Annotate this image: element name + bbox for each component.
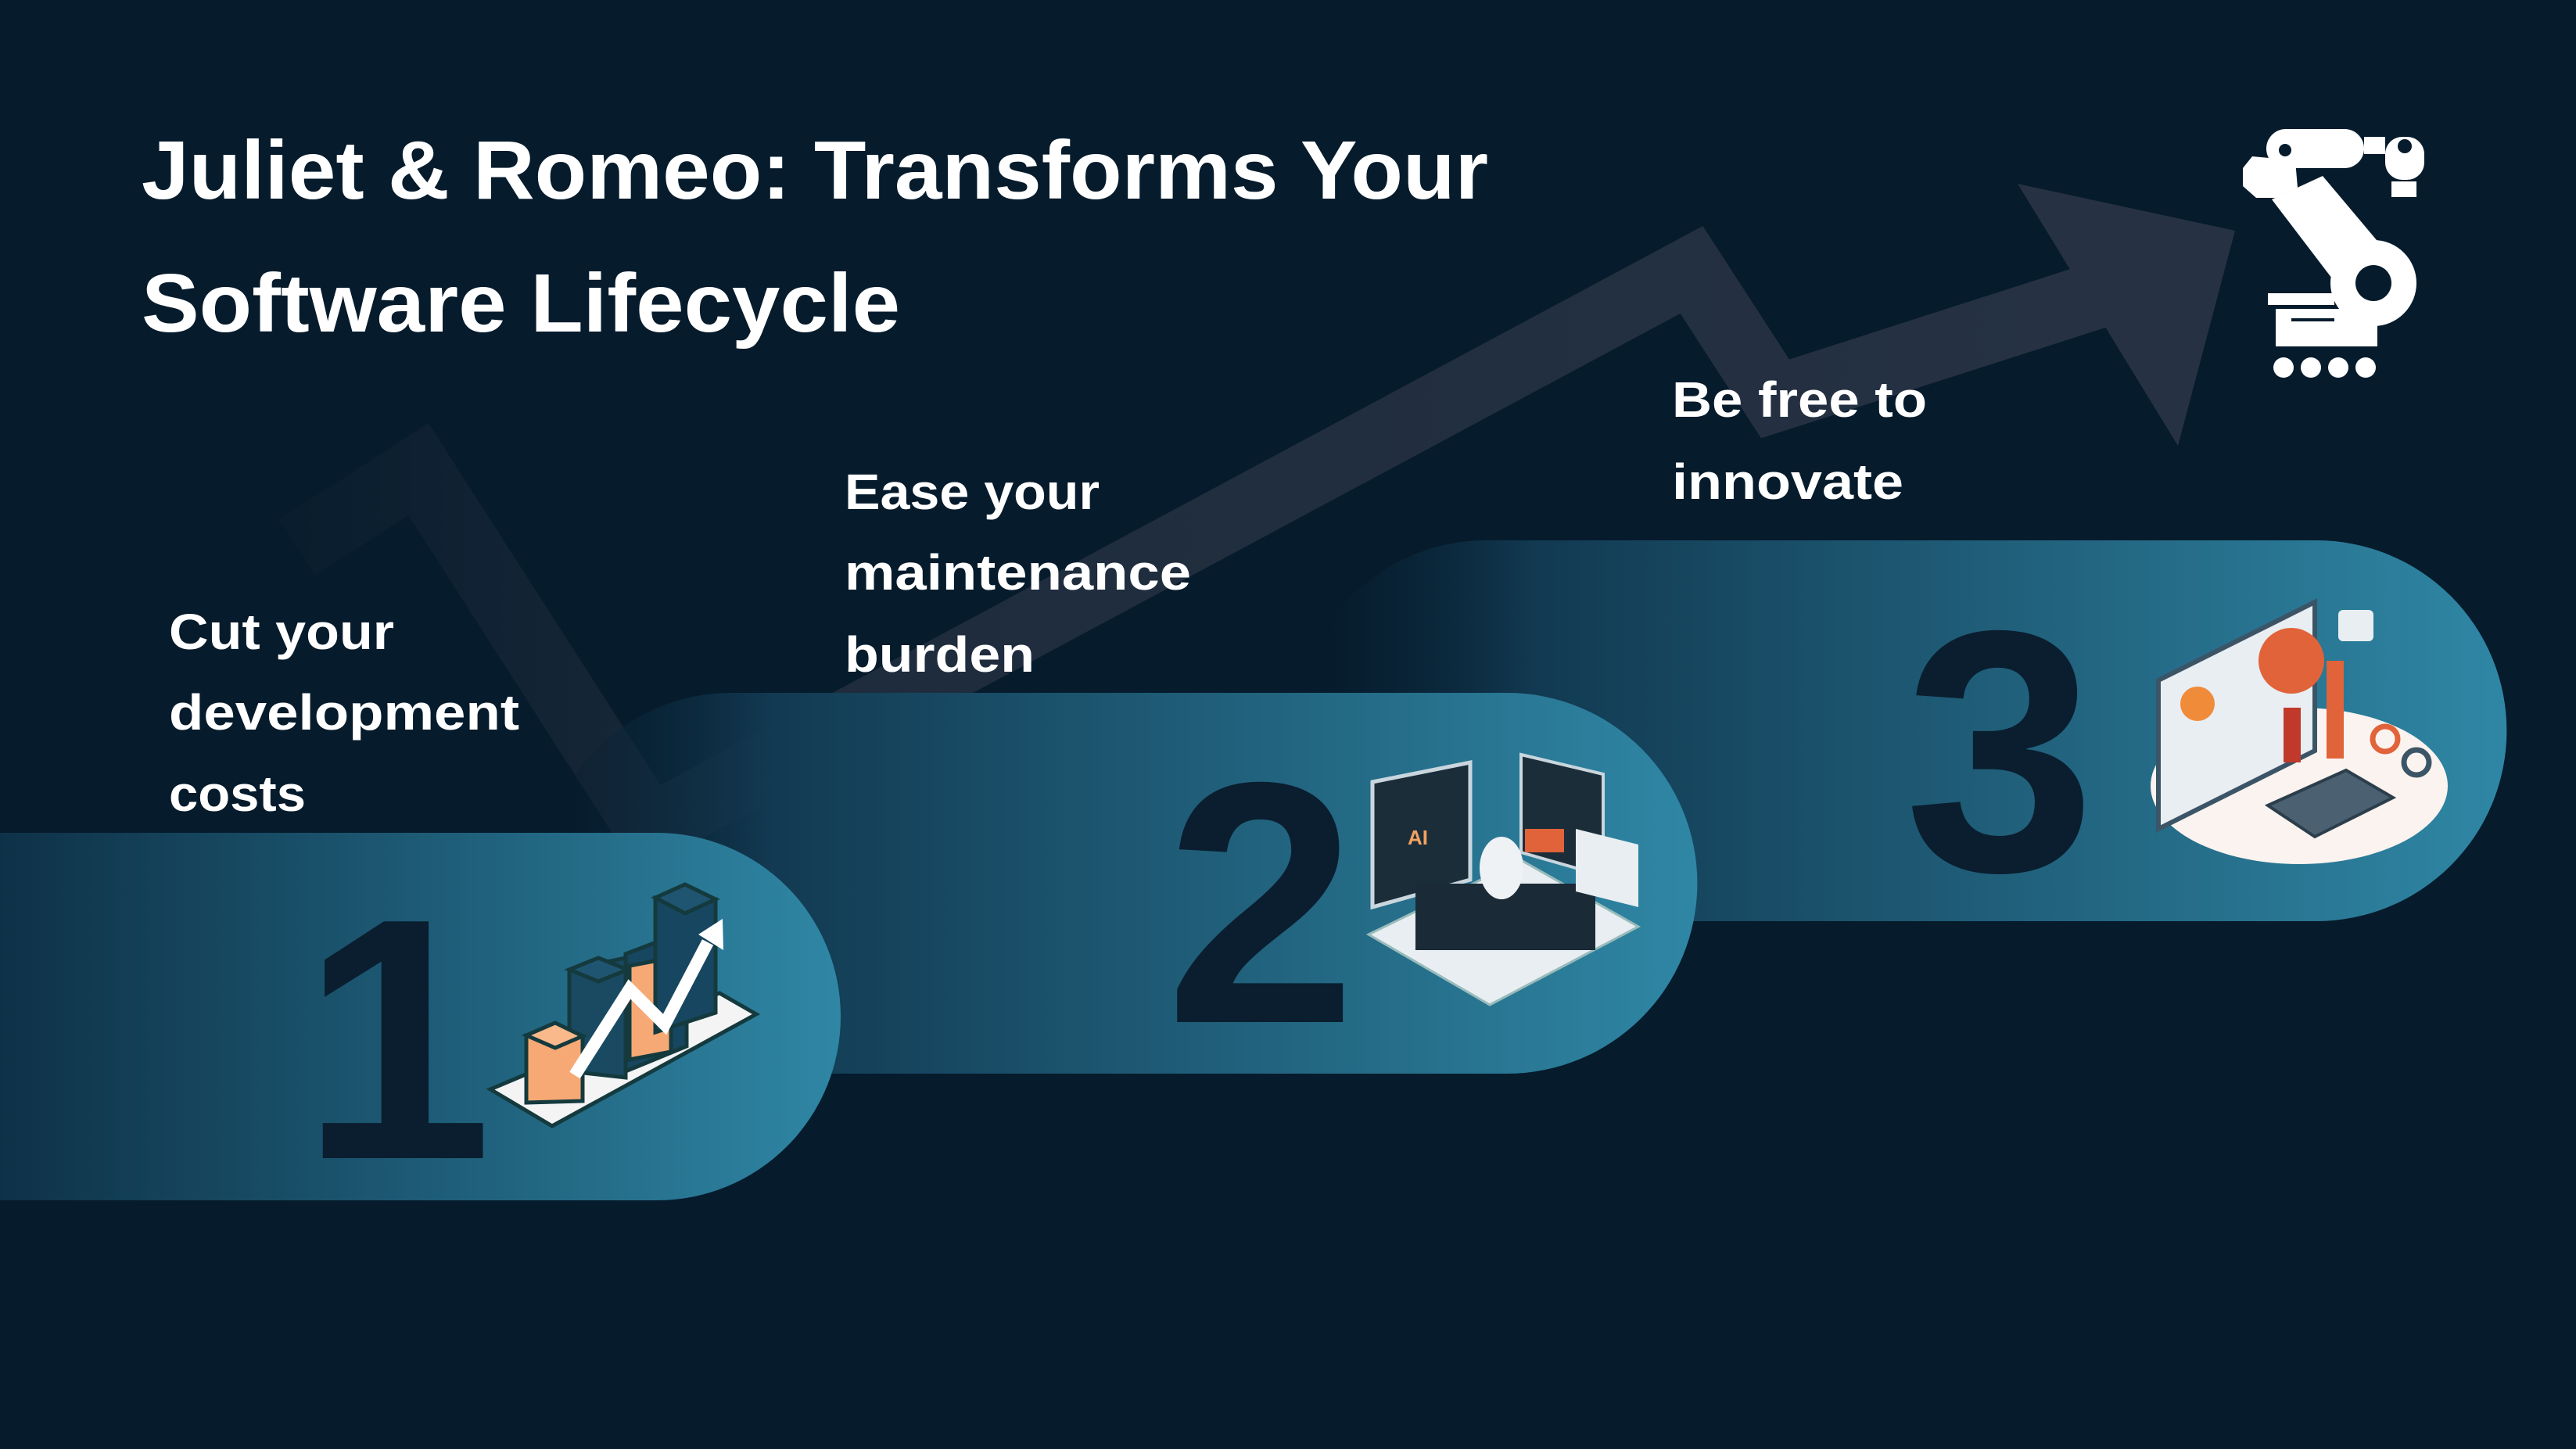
text: step 3: innovate — [1672, 454, 1903, 510]
text: step 2: Ease your — [845, 464, 1100, 520]
illustration 3: presentation — [2151, 602, 2448, 864]
title — [142, 124, 1488, 350]
title: Software Lifecycle — [142, 257, 900, 350]
number 2: 2 — [1165, 712, 1357, 1096]
text: step 3: Be free to — [1672, 371, 1927, 428]
title: Juliet & Romeo: Transforms Your — [142, 124, 1488, 217]
number 3: 3 — [1904, 560, 2096, 944]
text: step 2: burden — [845, 626, 1035, 683]
illustration 1: bar chart — [490, 884, 756, 1126]
icon: robot arm — [2243, 129, 2424, 378]
band 1 — [0, 833, 841, 1200]
band 3 — [1296, 540, 2506, 921]
text: step 1: development — [169, 684, 519, 741]
text: step 3 — [1672, 371, 1927, 510]
number 1: 1 — [301, 848, 493, 1232]
text: step 1: costs — [169, 766, 306, 822]
band 2 — [541, 693, 1697, 1074]
text: step 1: Cut your — [169, 604, 394, 660]
illustration 2: AI server: AI — [1408, 826, 1428, 849]
text: step 2 — [845, 464, 1191, 683]
arrow: growth zigzag — [297, 184, 2235, 829]
illustration 2: AI server — [1369, 755, 1638, 1005]
text: step 1 — [169, 604, 519, 822]
text: step 2: maintenance — [845, 544, 1191, 601]
